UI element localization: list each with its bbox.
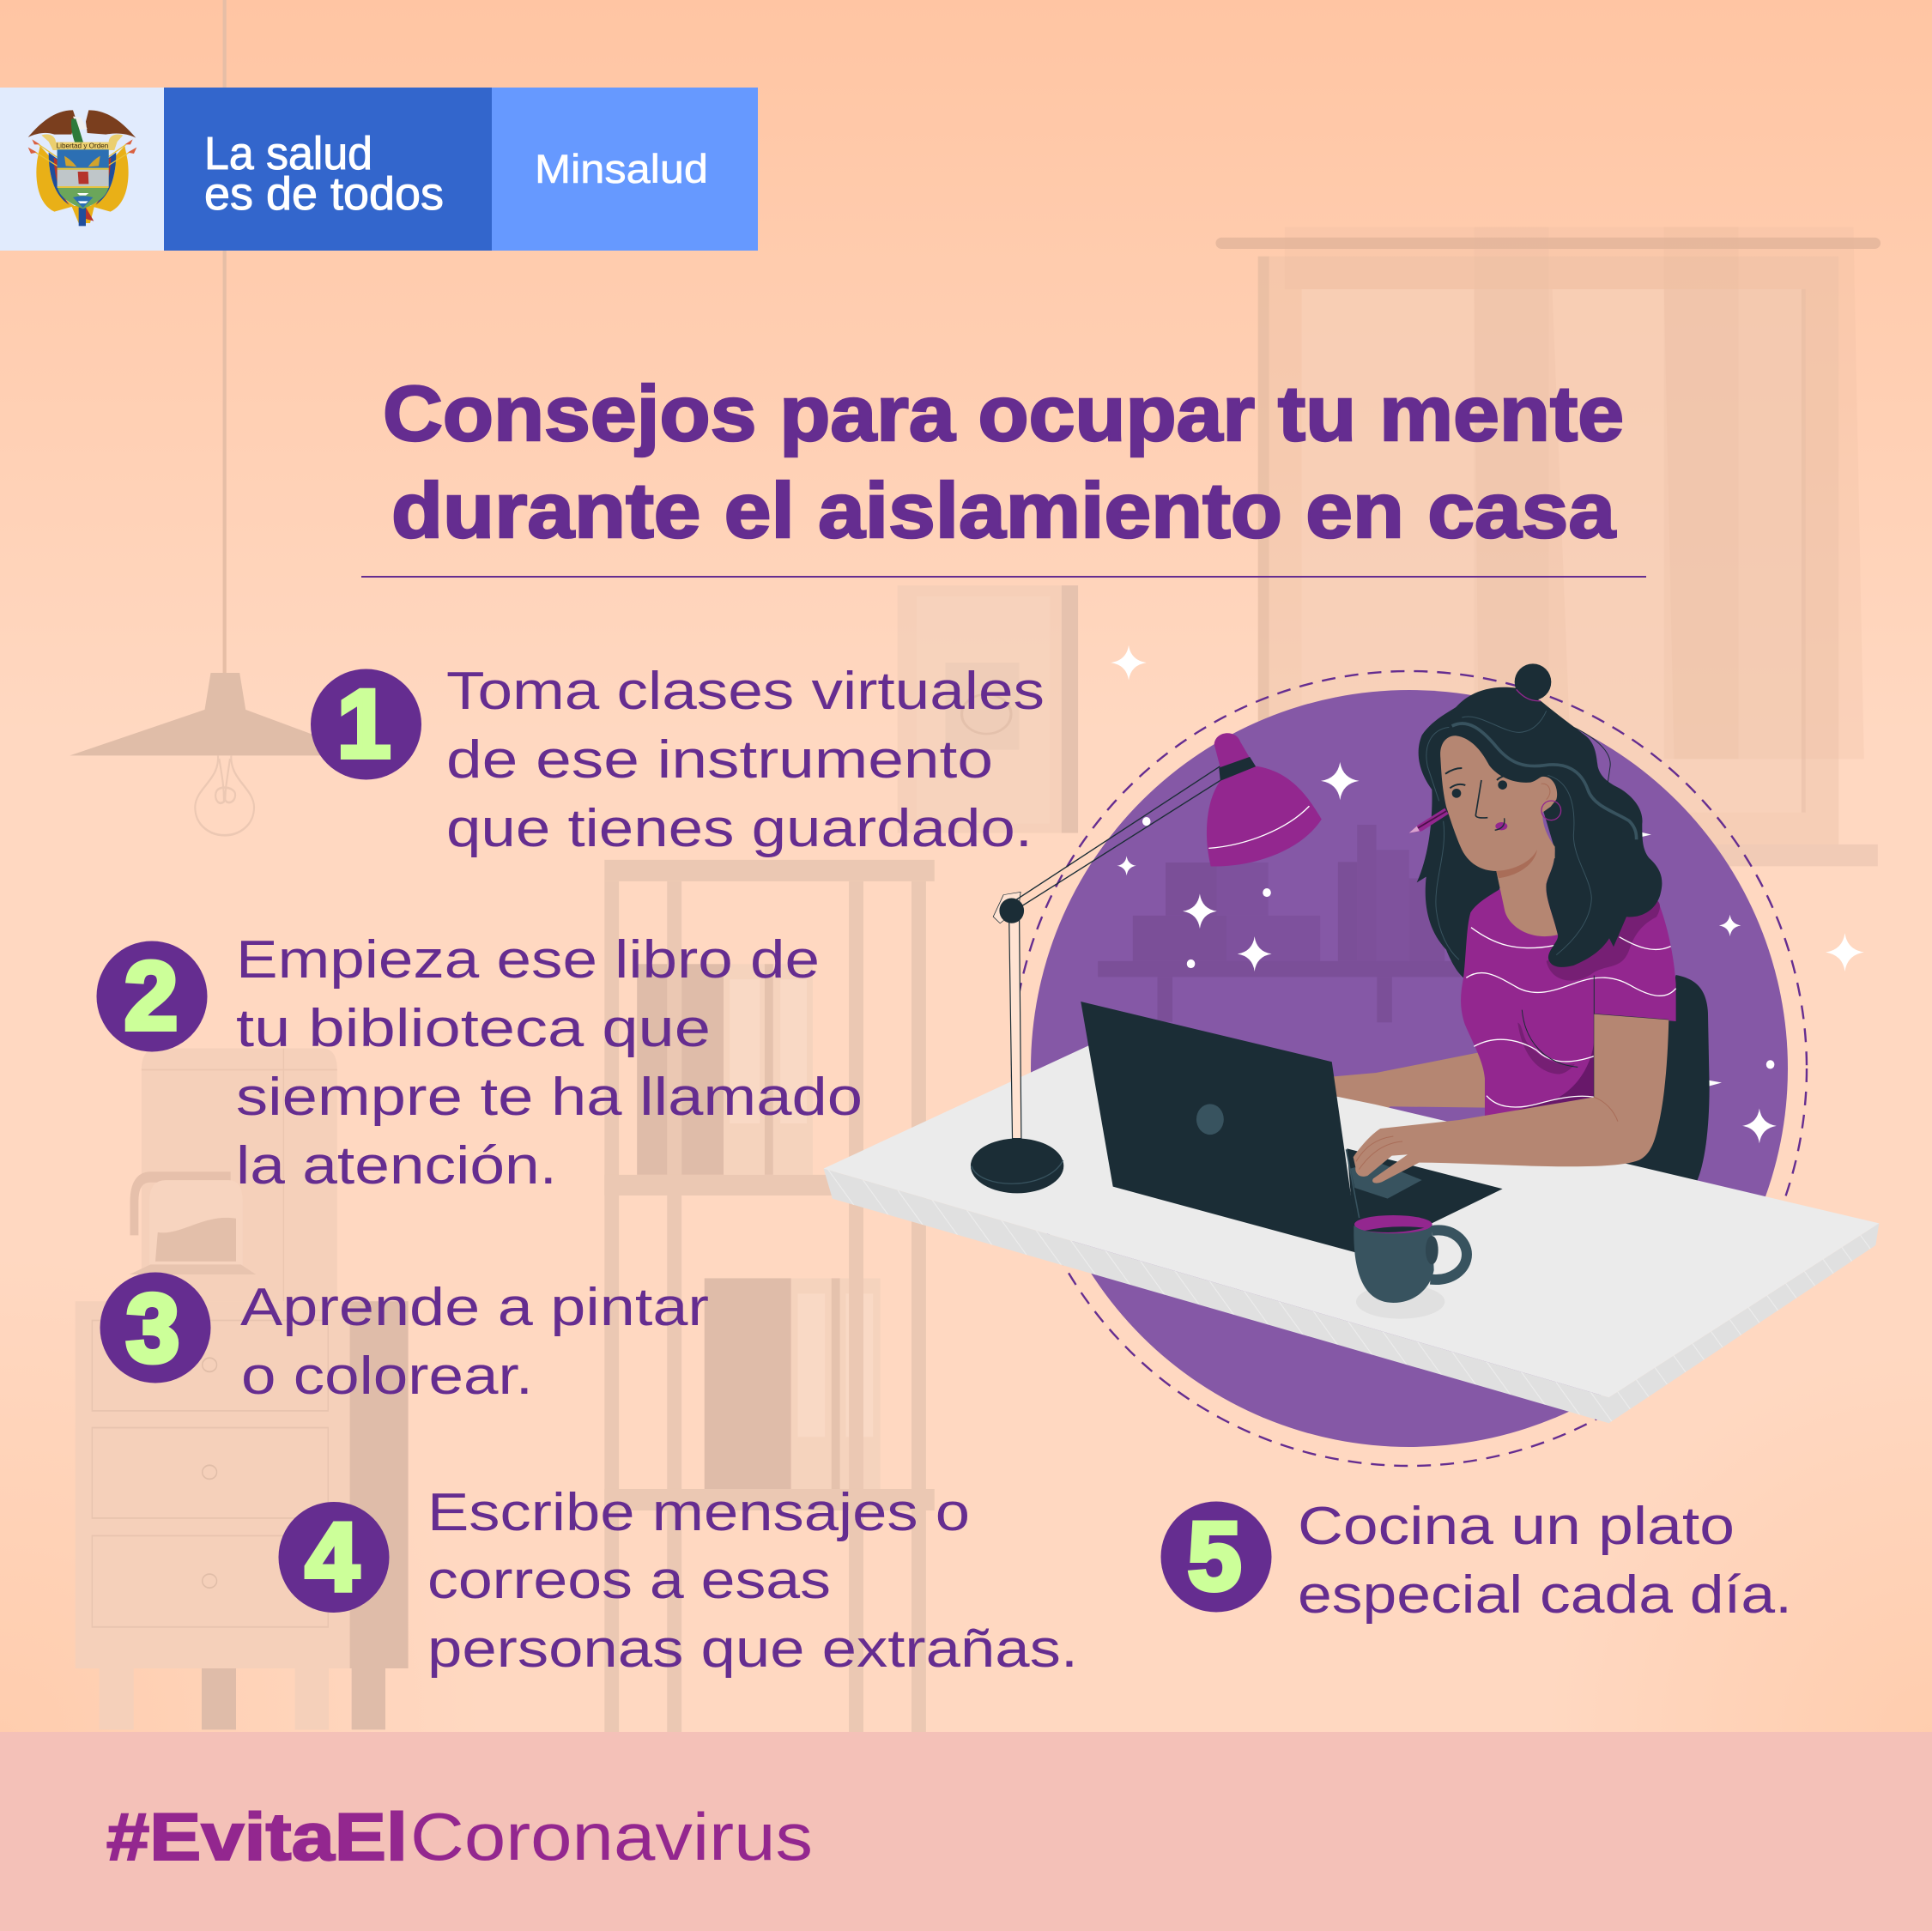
desk [824, 1045, 1879, 1423]
footer band with hashtag: #EvitaEl [106, 1799, 408, 1874]
hair top and right [1440, 687, 1662, 967]
tip 4 [278, 1483, 1078, 1679]
background: pendant lamp [70, 0, 328, 835]
left arm [1328, 1053, 1487, 1122]
tip 2 [96, 930, 863, 1196]
number badge 5 [1160, 1502, 1272, 1612]
title: durante el aislamiento en casa [391, 468, 1616, 554]
background: window and curtains [1215, 227, 1881, 866]
tip 4 text: correos a esas [427, 1551, 831, 1610]
bun [1515, 663, 1551, 700]
dashed ring [1012, 671, 1807, 1466]
number badge 2: 2 [124, 942, 178, 1050]
tip 3 [100, 1272, 709, 1406]
number badge 4: 4 [306, 1504, 359, 1611]
tip 3 text: Aprende a pintar [240, 1278, 709, 1337]
number badge 4 [278, 1502, 390, 1613]
footer band with hashtag [0, 1732, 1932, 1931]
number badge 1: 1 [337, 670, 391, 778]
tip 4 text [427, 1483, 1078, 1679]
slogan panel [164, 88, 492, 251]
tip 4 text: personas que extrañas. [427, 1619, 1078, 1679]
Minsalud panel [492, 88, 758, 251]
slogan panel: es de todos [204, 168, 444, 220]
hair strands [1452, 723, 1637, 839]
background: bookshelf [604, 860, 935, 1763]
number badge 3 [100, 1272, 211, 1383]
chair [1622, 975, 1710, 1183]
purple circle [1031, 690, 1788, 1447]
logo panel: coat of arms: Libertad y Orden [57, 141, 109, 149]
footer band with hashtag: Coronavirus [410, 1799, 813, 1874]
number badge 2 [96, 941, 208, 1052]
shelf with books and boxes [1098, 825, 1461, 1022]
tip 2 text: tu biblioteca que [236, 999, 711, 1058]
coffee mug [1354, 1215, 1467, 1319]
pencil [1409, 808, 1449, 833]
shirt [1461, 869, 1676, 1117]
tip 1 text [446, 662, 1045, 858]
laptop keyboard [1347, 1148, 1503, 1260]
slogan panel: La salud [204, 128, 372, 179]
tip 2 text: siempre te ha llamado [236, 1068, 863, 1127]
illustration: woman working at desk [824, 645, 1879, 1466]
title: Consejos para ocupar tu mente [383, 371, 1624, 457]
tip 4 text: Escribe mensajes o [427, 1483, 970, 1542]
title [383, 371, 1624, 554]
right arm and hand [1354, 1014, 1669, 1183]
header logo bar [0, 88, 758, 251]
tip 5 text [1298, 1497, 1792, 1625]
tip 5 text: Cocina un plato [1298, 1497, 1735, 1556]
number badge 5: 5 [1188, 1503, 1241, 1610]
sparkles and dots [1111, 645, 1864, 1143]
tip 3 text [240, 1278, 709, 1406]
background: nightstand and kettle [76, 1049, 409, 1729]
tip 1 [311, 662, 1045, 858]
logo panel: coat of arms [0, 88, 164, 251]
tip 3 text: o colorear. [241, 1347, 533, 1406]
tip 1 text: Toma clases virtuales [446, 662, 1045, 721]
desk lamp [971, 733, 1322, 1193]
tip 2 text: Empieza ese libro de [236, 930, 820, 990]
face [1440, 735, 1557, 871]
number badge 1 [311, 669, 421, 779]
neck [1496, 850, 1558, 936]
tip 5 [1160, 1497, 1792, 1625]
tip 2 text [236, 930, 863, 1196]
laptop screen [1081, 1002, 1360, 1254]
tip 1 text: que tienes guardado. [446, 799, 1033, 858]
hair back [1417, 695, 1534, 980]
tip 5 text: especial cada día. [1298, 1565, 1792, 1625]
tip 1 text: de ese instrumento [446, 730, 993, 790]
Minsalud panel: Minsalud [535, 146, 708, 191]
tip 2 text: la atención. [236, 1136, 557, 1196]
background: picture frame [898, 585, 1078, 833]
woman [1354, 663, 1676, 1183]
number badge 3: 3 [126, 1274, 179, 1382]
